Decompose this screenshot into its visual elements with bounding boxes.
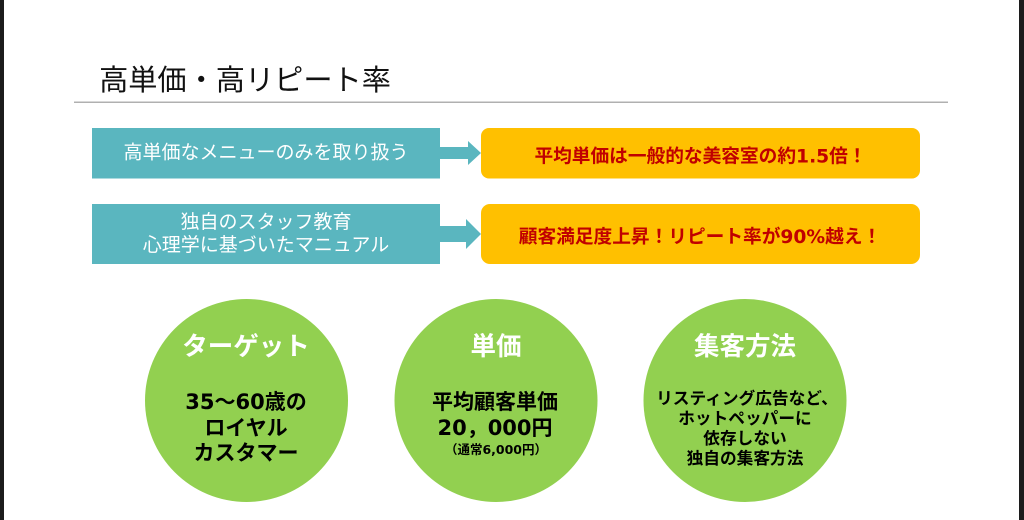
text: target details: カスタマー — [194, 441, 298, 465]
circle: unit price — [394, 299, 598, 502]
row 2: result box: 顧客満足度上昇！リピート率が90%越え！ — [519, 226, 881, 248]
text: customer acquisition details — [656, 388, 838, 468]
text: customer acquisition details: ホットペッパーに — [678, 409, 812, 428]
row 1: result box — [481, 128, 920, 178]
heading: unit price: 単価 — [470, 333, 522, 361]
heading: customer acquisition: 集客方法 — [694, 333, 796, 361]
text: unit price details: 20，000円 — [437, 416, 553, 440]
text: customer acquisition details: 独自の集客方法 — [687, 448, 804, 468]
text: unit price details: （通常6,000円） — [445, 442, 547, 457]
row 1: cause box — [92, 128, 440, 178]
row 2: cause box — [92, 204, 440, 264]
text: customer acquisition details: リスティング広告など、 — [656, 388, 838, 408]
arrow: row 1 — [440, 141, 481, 165]
text: target details: 35～60歳の — [185, 390, 307, 414]
text: customer acquisition details: 依存しない — [703, 428, 787, 448]
row 2: cause box: 独自のスタッフ教育 — [180, 211, 352, 233]
text: unit price details — [432, 390, 558, 457]
text: target details — [185, 390, 307, 465]
circle: target — [145, 299, 348, 502]
row 1: result box: 平均単価は一般的な美容室の約1.5倍！ — [534, 146, 867, 168]
arrow: row 2 — [440, 219, 481, 249]
circle: customer acquisition — [644, 299, 846, 502]
row 2: cause box: 心理学に基づいたマニュアル — [143, 234, 389, 256]
text: unit price details: 平均顧客単価 — [432, 390, 558, 414]
text: target details: ロイヤル — [204, 416, 288, 440]
row 2: result box — [481, 204, 920, 264]
title: 高単価・高リピート率 — [99, 64, 391, 97]
row 1: cause box: 高単価なメニューのみを取り扱う — [123, 142, 409, 164]
heading: target: ターゲット — [182, 333, 310, 361]
